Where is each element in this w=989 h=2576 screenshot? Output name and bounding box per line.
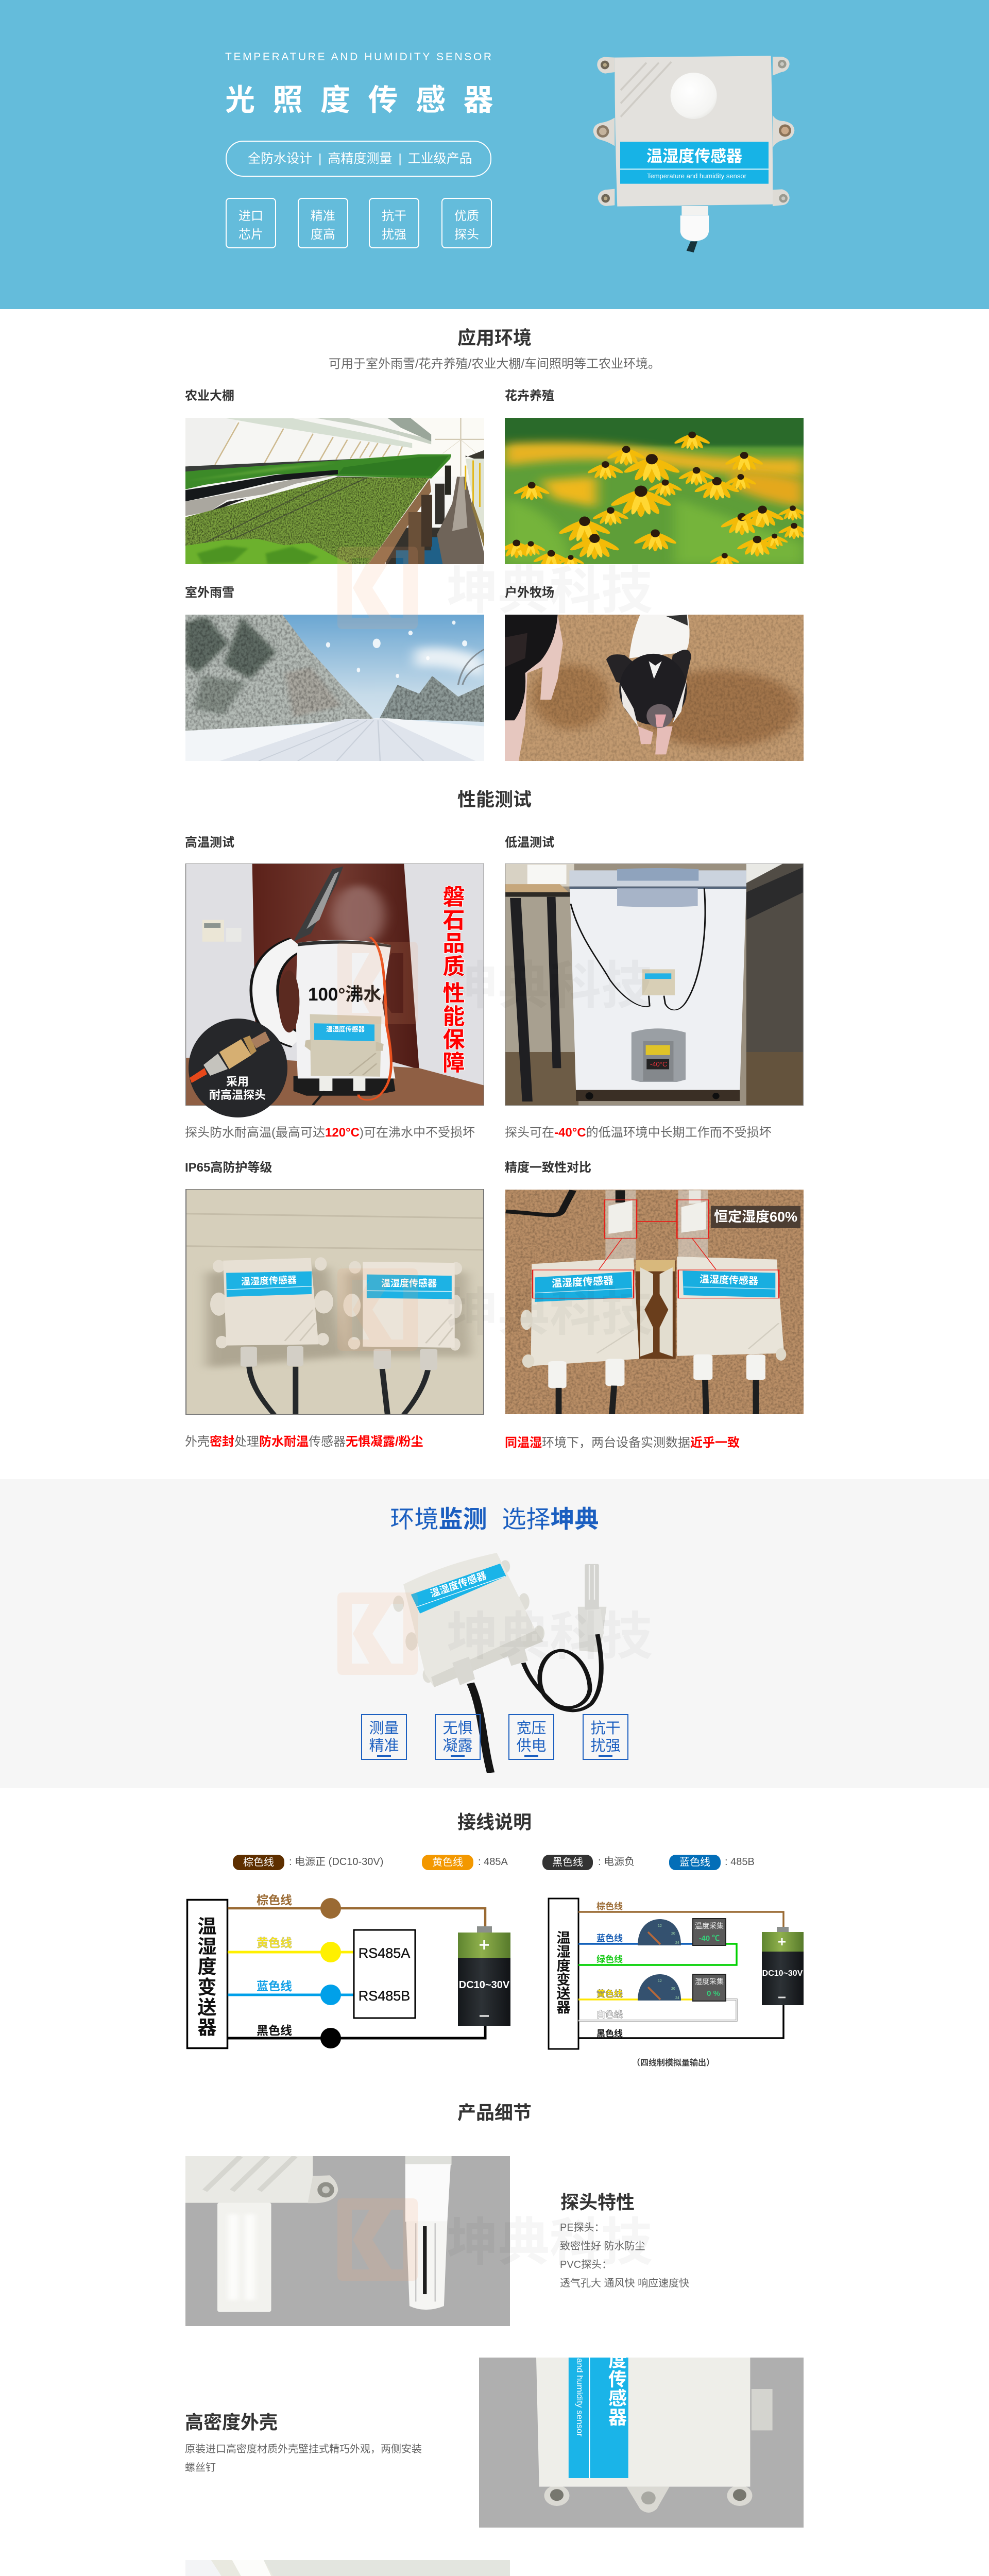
wiring diagram: four-wire analog: 绿色线 — [596, 1954, 623, 1964]
promo product photo: sensor with probe — [393, 1553, 607, 1773]
photo: two sensors precision comparison — [505, 1190, 804, 1414]
hero badge: anti-interference — [369, 198, 419, 248]
hero english subtitle: TEMPERATURE AND HUMIDITY SENSOR — [225, 51, 493, 63]
freezer display text: -40°C — [650, 1060, 667, 1068]
heading: product details: 产品细节 — [457, 2102, 532, 2123]
wiring diagram: four-wire analog: 蓝色线 — [596, 1933, 623, 1943]
hero badge: quality probe — [441, 198, 492, 248]
detail text: probe: PVC探头： — [560, 2259, 612, 2270]
watermark: promo section: 坤典科技 — [447, 1608, 653, 1666]
detail text: housing: 原装进口高密度材质外壳壁挂式精巧外观，两侧安装 — [185, 2444, 422, 2455]
wiring diagram: RS485: 棕色线 — [257, 1893, 292, 1907]
legend brown meaning: : 电源正 (DC10-30V) — [289, 1856, 383, 1868]
inset probe caption: 采用 — [226, 1075, 249, 1088]
wiring diagram: four-wire analog: 20 — [671, 1987, 675, 1991]
legend yellow meaning: : 485A — [478, 1856, 508, 1868]
wiring diagram: four-wire analog: 湿度采集 — [695, 1977, 724, 1986]
inset probe caption — [209, 1075, 266, 1101]
photo: flowers — [505, 418, 804, 564]
label: outdoor pasture: 户外牧场 — [505, 586, 554, 600]
hero badge: quality probe: 探头 — [454, 228, 479, 242]
promo badge: wide voltage: 供电 — [516, 1738, 546, 1754]
photo: snowy road — [185, 615, 484, 761]
wiring diagram: four-wire analog: 20 — [671, 1932, 675, 1936]
hero badge: anti-interference: 扰强 — [382, 228, 406, 242]
wiring diagram: RS485: 黑色线 — [257, 2024, 292, 2037]
hero banner — [0, 0, 989, 309]
detail text: probe: 透气孔大 通风快 响应速度快 — [560, 2278, 689, 2289]
photo: piglet — [505, 615, 804, 761]
photo: freezer low temperature test — [505, 863, 804, 1106]
promo badge: accurate: 精准 — [369, 1738, 399, 1754]
watermark: promo section — [337, 1592, 657, 1675]
heading: performance test: 性能测试 — [457, 789, 532, 810]
legend blue meaning: : 485B — [725, 1856, 755, 1868]
hero product photo: light sensor — [593, 56, 794, 252]
label: greenhouse: 农业大棚 — [185, 389, 234, 403]
promo badge: condensation — [435, 1714, 481, 1760]
wiring diagram: RS485: RS485A — [359, 1945, 410, 1961]
heading: application environment: 应用环境 — [457, 327, 532, 348]
photo: waterproof seal closeup — [185, 2560, 510, 2576]
hero pill text: 全防水设计 | 高精度测量 | 工业级产品 — [248, 151, 472, 166]
promo badge: wide voltage — [508, 1714, 554, 1760]
hero badge: high precision — [298, 198, 348, 248]
label: high temperature test: 高温测试 — [185, 836, 234, 850]
detail text: probe — [560, 2222, 689, 2289]
promo badge: anti-interference: 扰强 — [590, 1738, 620, 1754]
wiring diagram: four-wire analog: -40 ℃ — [699, 1934, 720, 1943]
photo: waterproof sensors on wall — [185, 1189, 484, 1415]
watermark: section three — [337, 1268, 657, 1351]
wiring diagram: four-wire analog: 24 — [675, 1996, 679, 2000]
wiring diagram: RS485 — [186, 1893, 510, 2049]
legend blue pill — [669, 1855, 721, 1870]
promo badge: anti-interference: 抗干 — [590, 1720, 620, 1737]
photo: housing closeup — [479, 2358, 804, 2528]
left sensor label text: 温湿度传感器 — [241, 1275, 297, 1287]
label: low temperature test: 低温测试 — [505, 836, 554, 850]
photo: red slogan: 磐石品质 性能保障 — [443, 885, 465, 1076]
wiring diagram: four-wire analog: 24 — [675, 1941, 679, 1945]
legend black meaning: : 电源负 — [598, 1856, 635, 1868]
hero badge: high precision: 度高 — [311, 228, 335, 242]
inset probe caption: 耐高温探头 — [209, 1089, 266, 1101]
caption: low temperature test: 探头可在-40°C的低温环境中长期工作而不受损坏 — [505, 1126, 772, 1140]
label: IP65 protection: IP65高防护等级 — [185, 1161, 272, 1175]
caption: IP65: 外壳密封处理防水耐温传感器无惧凝露/粉尘 — [185, 1435, 423, 1449]
detail heading: housing: 高密度外壳 — [185, 2412, 278, 2433]
label: flower farming: 花卉养殖 — [505, 389, 554, 403]
photo: kettle boiling water test — [185, 863, 484, 1106]
precision photo label left: 温湿度传感器 — [552, 1275, 613, 1290]
wiring diagram: RS485: 温湿度变送器 — [198, 1916, 216, 2038]
detail heading: probe: 探头特性 — [560, 2192, 635, 2213]
photo: greenhouse — [185, 418, 484, 564]
promo badge: anti-interference — [583, 1714, 628, 1760]
legend black pill — [542, 1855, 593, 1870]
detail text: probe: 致密性好 防水防尘 — [560, 2241, 645, 2252]
label: precision comparison: 精度一致性对比 — [505, 1161, 591, 1175]
wiring diagram: RS485: 蓝色线 — [257, 1979, 292, 1993]
caption: high temperature test: 探头防水耐高温(最高可达120°C)可在沸水中不受损坏 — [185, 1126, 475, 1140]
right sensor label text: 温湿度传感器 — [381, 1278, 437, 1289]
watermark: section two — [337, 942, 657, 1024]
wiring diagram: four-wire analog: 棕色线 — [596, 1901, 623, 1911]
promo badge: accurate: 测量 — [369, 1720, 399, 1737]
wiring diagram: RS485: 黄色线 — [257, 1936, 292, 1950]
legend: wire colours — [233, 1855, 755, 1870]
photo: probe closeup — [185, 2156, 510, 2326]
legend yellow pill — [422, 1855, 473, 1870]
wiring diagram: RS485: RS485B — [359, 1988, 410, 2004]
legend black pill: 黑色线 — [552, 1857, 583, 1868]
subheading: application environment: 可用于室外雨雪/花卉养殖/农业大棚/车间照明等工农业环境。 — [329, 357, 660, 371]
detail text: housing: 螺丝钉 — [185, 2462, 216, 2473]
legend brown pill: 棕色线 — [243, 1857, 274, 1868]
hero badge: anti-interference: 抗干 — [382, 209, 406, 223]
photo: boiling water text: 100°沸水 — [308, 985, 381, 1005]
wiring diagram: four-wire analog: 温度采集 — [695, 1922, 724, 1930]
promo sensor label text: 温湿度传感器 — [429, 1570, 488, 1600]
promo heading: 环境监测 选择坤典 — [390, 1505, 599, 1533]
housing photo label: english: and humidity sensor — [575, 2358, 585, 2436]
wiring diagram: four-wire analog: 温湿度变送器 — [556, 1930, 571, 2015]
watermark: details upper: 坤典科技 — [447, 2214, 653, 2272]
hero badge: quality probe: 优质 — [454, 209, 479, 223]
photo: kettle sensor label text: 温湿度传感器 — [326, 1026, 365, 1033]
watermark: section one — [337, 547, 657, 629]
sensor label english: Temperature and humidity sensor — [647, 172, 746, 180]
wiring diagram: four-wire analog: 黄色线 — [596, 1989, 623, 1999]
hero badge: imported chip: 芯片 — [238, 228, 263, 242]
sensor label chinese: 温湿度传感器 — [646, 147, 742, 165]
watermark: section two: 坤典科技 — [447, 957, 653, 1015]
hero badge: high precision: 精准 — [311, 209, 335, 223]
promo badge: wide voltage: 宽压 — [516, 1720, 546, 1737]
legend yellow pill: 黄色线 — [432, 1857, 463, 1868]
wiring diagram: four-wire analog: 0 % — [707, 1989, 720, 1998]
hero badge: imported chip — [226, 198, 276, 248]
promo badge: condensation: 无惧 — [442, 1720, 473, 1737]
wiring diagram: four-wire analog: 黑色线 — [596, 2028, 623, 2039]
wiring diagram: four-wire analog: （四线制模拟量输出） — [632, 2058, 714, 2067]
promo badge: condensation: 凝露 — [442, 1738, 473, 1754]
hero feature pill — [226, 141, 491, 177]
promo badge: accurate — [361, 1714, 407, 1760]
heading: wiring: 接线说明 — [457, 1811, 532, 1833]
watermark: section three: 坤典科技 — [447, 1284, 653, 1342]
wiring diagram: four-wire analog: 12 — [658, 1979, 662, 1983]
wiring diagram: RS485: DC10~30V — [459, 1979, 510, 1991]
wiring diagram: four-wire analog — [548, 1898, 804, 2067]
precision photo label right: 温湿度传感器 — [700, 1274, 758, 1287]
wiring diagram: four-wire analog: 12 — [658, 1924, 662, 1928]
inset: high temperature probe — [189, 1019, 287, 1117]
detail text: housing — [185, 2443, 422, 2473]
detail text: probe: PE探头： — [560, 2222, 605, 2233]
label: outdoor rain and snow: 室外雨雪 — [185, 586, 234, 600]
panel: environmental monitoring promo — [0, 1479, 989, 1788]
watermark: section one: 坤典科技 — [447, 562, 653, 620]
constant humidity tag: 恒定湿度60% — [714, 1209, 797, 1225]
watermark: details upper — [337, 2198, 657, 2281]
hero badge: imported chip: 进口 — [238, 209, 263, 223]
legend brown pill — [233, 1855, 284, 1870]
legend blue pill: 蓝色线 — [679, 1857, 710, 1868]
hero title: 光照度传感器 — [225, 83, 511, 117]
wiring diagram: four-wire analog: DC10~30V — [762, 1969, 803, 1978]
caption: precision: 同温湿环境下，两台设备实测数据近乎一致 — [505, 1436, 740, 1450]
wiring diagram: four-wire analog: 白色线 — [596, 2009, 623, 2020]
